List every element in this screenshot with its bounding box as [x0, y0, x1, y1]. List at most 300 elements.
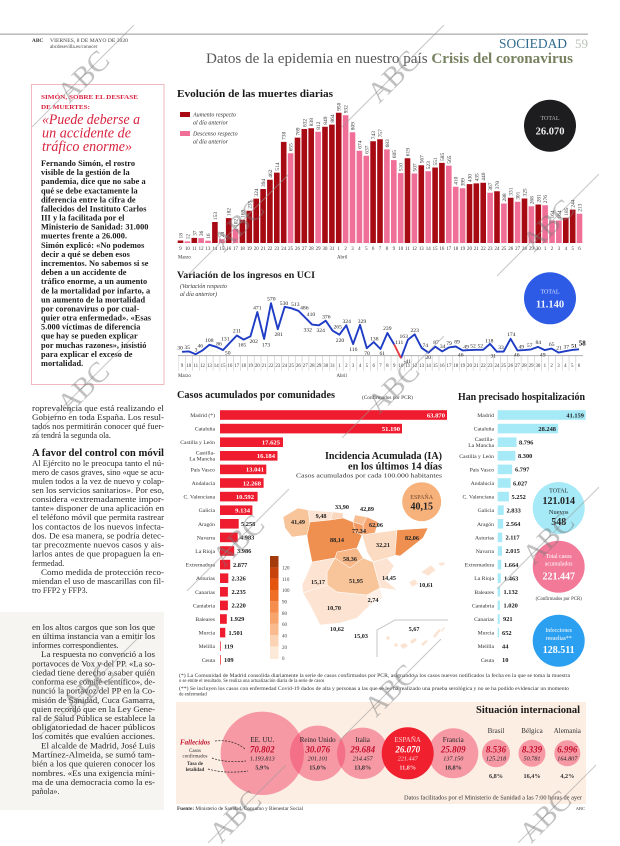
text block: column continuation: Gobierno en toda España. Los resul-: [32, 413, 164, 422]
callout: total ICU: TOTAL: [540, 290, 560, 296]
key: Fallecidos: [180, 738, 210, 746]
region labels: Galicia: [478, 508, 494, 514]
page header: 59: [575, 36, 588, 51]
date axis: 21: [262, 364, 267, 369]
date axis: 11: [193, 364, 199, 369]
values: 921: [503, 616, 513, 623]
bar value labels: 102: [234, 219, 240, 227]
region labels: Aragón: [198, 522, 215, 528]
date axis: 10: [398, 247, 404, 252]
date axis: 9: [393, 247, 396, 252]
small country names: Brasil: [488, 727, 504, 735]
article text: nombres. «Es una exigencia míni-: [32, 769, 155, 778]
date axis: 8: [386, 247, 389, 252]
date axis: 18: [453, 364, 459, 369]
date axis: 13: [419, 364, 425, 369]
fatality rates: 16,4%: [523, 773, 541, 780]
month labels: Marzo: [178, 256, 191, 260]
date axis: 28: [522, 364, 527, 369]
footnotes: de enfermedad: [179, 692, 207, 698]
bar value labels: 832: [302, 119, 308, 127]
date axis: 25: [501, 364, 507, 369]
region labels: La Rioja: [474, 576, 494, 582]
legend: Descenso respecto: [192, 132, 238, 138]
point labels: 49: [519, 344, 524, 350]
deaths: 6.996: [557, 744, 578, 754]
date axis: 5: [571, 247, 574, 252]
point labels: 163: [400, 334, 408, 340]
date axis: 24: [281, 247, 287, 252]
date axis: 26: [295, 247, 300, 252]
region labels: Castilla y León: [459, 454, 494, 460]
region labels: Cataluña: [195, 427, 215, 433]
map values: 9,48: [316, 513, 326, 520]
date axis: 28: [522, 247, 528, 252]
callout: total ICU: [524, 272, 576, 324]
date axis: 1: [544, 364, 547, 369]
bar value labels: 809: [350, 122, 356, 130]
date axis: 20: [467, 247, 472, 252]
point labels: 376: [322, 314, 331, 320]
date axis: 26: [296, 364, 301, 369]
date axis: 19: [460, 364, 466, 369]
sidebar body text: diferencia entre la cifra de: [41, 195, 136, 204]
callout: resolved infections: 128.511: [543, 645, 575, 656]
date axis: 17: [233, 247, 238, 252]
point labels: 324: [317, 328, 325, 334]
region labels: C. Valenciana: [184, 495, 215, 501]
point labels: 46: [458, 353, 464, 359]
month labels: Abril: [337, 256, 348, 260]
footnotes: (**) Se incluyen los casos con enfermedad Covid-19 dados de alta y personas a las que se les ha realizado una prueba serológica y no se ha podido evidenciar un momento: [179, 687, 570, 692]
date axis: 30: [323, 364, 329, 369]
legend: al día anterior: [193, 140, 229, 146]
point labels: 324: [343, 319, 351, 325]
bar value labels: 37: [192, 230, 198, 236]
bar value labels: 268: [529, 196, 535, 204]
fatality rates: 5,9%: [255, 764, 269, 772]
chart subtitle: al día anterior): [180, 291, 217, 298]
region labels: Castilla-: [475, 437, 494, 443]
date axis: 30: [535, 364, 541, 369]
color scale legend: 60: [282, 623, 288, 628]
color scale legend: 40: [282, 634, 288, 640]
date axis: 16: [439, 247, 445, 252]
sidebar body text: Ministerio de Sanidad: 31.000: [41, 223, 148, 232]
point labels: 281: [275, 332, 283, 338]
article text: [32, 623, 156, 796]
callout: total cases: [533, 541, 585, 593]
date axis: 12: [412, 364, 418, 369]
region labels: La Rioja: [195, 549, 215, 555]
date axis: 9: [393, 364, 396, 369]
values: 6.797: [515, 467, 530, 474]
country names: EE. UU.: [250, 736, 275, 744]
bar value labels: 567: [419, 155, 425, 163]
text block: Ejército: mero de casos graves, sino «que se acu-: [32, 468, 164, 477]
negative segment: [394, 344, 401, 358]
chart heading: Han precisado hospitalización: [458, 392, 585, 403]
bar value labels: 812: [316, 121, 322, 130]
chart subtitle: (Variación respecto: [180, 284, 227, 290]
date axis: 15: [219, 247, 225, 252]
chart heading: Evolución de las muertes diarias: [177, 89, 333, 100]
point labels: 530: [280, 301, 288, 307]
bar value labels: 849: [323, 116, 329, 125]
date axis: 27: [302, 247, 307, 252]
values outside bars: 1.929: [230, 616, 244, 623]
date axis: 21: [474, 247, 479, 252]
map values: 51,95: [349, 578, 363, 585]
date axis: 11: [192, 247, 197, 252]
date axis: 24: [495, 247, 500, 252]
region labels: Ceuta: [481, 658, 494, 664]
article text: El alcalde de Madrid, José Luis: [41, 742, 155, 750]
point labels: 52: [470, 344, 476, 350]
fatality rates: 4,2%: [560, 773, 574, 780]
text block: Ejército: [32, 459, 164, 595]
confirmed cases: 50.781: [523, 756, 541, 762]
map values: 62,06: [369, 522, 383, 529]
panel heading: Situación internacional: [476, 705, 580, 716]
page title: Datos de la epidemia en nuestro país Crisis del coronavirus: [206, 51, 573, 67]
date axis: 27: [515, 364, 520, 369]
fatality rates: [255, 764, 574, 780]
fatality rates: 13,8%: [354, 764, 371, 772]
region labels: Cantabria: [193, 603, 215, 609]
map values: 14,45: [382, 575, 396, 582]
PCR note: (Confirmados por PCR): [536, 597, 582, 602]
region labels: Asturias: [475, 535, 495, 541]
sidebar body text: muertes frente a 26.000.: [41, 232, 127, 241]
region labels: Extremadura: [465, 563, 494, 569]
point labels: 58: [579, 339, 586, 347]
article text: obligatoriedad de hacer públicos: [32, 723, 155, 732]
point labels: 165: [238, 342, 246, 348]
region labels: Cataluña: [474, 427, 494, 433]
point labels: 21: [556, 346, 562, 352]
date axis: 1: [338, 364, 341, 369]
date axis: 13: [419, 247, 424, 252]
date axis: 3: [557, 364, 560, 369]
date axis: 11: [405, 247, 410, 252]
confirmed cases: 214.457: [353, 756, 374, 762]
map values: 2,74: [368, 597, 378, 604]
date axis: 11: [406, 364, 411, 369]
bar value labels: 12: [185, 234, 191, 239]
date axis: 2: [550, 364, 553, 369]
article text: ciedad tiene derecho a saber quién: [32, 668, 155, 678]
text block: Ejército: tante» disponer de una aplicación en: [32, 504, 164, 513]
sidebar body text: para explicar el exceso de: [41, 350, 133, 359]
article text: los comités que evalúen acciones.: [32, 732, 155, 741]
date axis: 21: [474, 364, 479, 369]
watermarks: ABC: [361, 355, 426, 420]
region labels: Madrid: [477, 413, 494, 419]
point labels: 174: [507, 332, 516, 338]
chart: Casos acumulados por comunidades: [177, 390, 447, 665]
point labels: -41: [404, 359, 411, 365]
date axis: 12: [412, 247, 417, 252]
bar value labels: 838: [309, 118, 315, 126]
point labels: 116: [349, 347, 358, 353]
region labels: C. Valenciana: [463, 495, 494, 501]
bar value labels: 605: [392, 150, 398, 158]
PCR note: (Confirmados por PCR): [362, 394, 413, 401]
footnotes: [179, 674, 571, 698]
region labels: Canarias: [474, 617, 495, 623]
values: [502, 412, 584, 664]
date axis: 29: [529, 247, 534, 252]
key: Casos: [189, 749, 201, 754]
article text: La respuesta no convenció a los: [41, 650, 155, 659]
values inside bars: 10.592: [236, 494, 255, 501]
confirmed cases: 164.807: [557, 756, 578, 762]
date axis: 23: [488, 247, 493, 252]
deaths: 26.070: [394, 744, 421, 754]
region labels: Melilla: [199, 644, 215, 650]
point labels: 3: [195, 347, 198, 353]
sidebar body text: pandemia, dice que no sabe a: [41, 177, 146, 186]
region labels: Cantabria: [472, 603, 494, 609]
watermarks: ABC: [206, 193, 271, 258]
page header: SOCIEDAD: [499, 37, 567, 52]
point labels: 410: [307, 312, 315, 318]
region labels: Extremadura: [186, 563, 215, 569]
point labels: [177, 296, 586, 365]
date axis: 4: [358, 247, 361, 252]
map heading: [325, 451, 442, 472]
date axis: 8: [386, 364, 389, 369]
bar value labels: 331: [509, 187, 515, 196]
date axis: 22: [481, 364, 486, 369]
bar value labels: 435: [474, 173, 480, 181]
article text: ma de una democracia como la es-: [32, 778, 155, 787]
point labels: 202: [250, 339, 258, 345]
date axis: 24: [494, 364, 500, 369]
text block: column continuation: roprevalencia que está realizando el: [32, 404, 165, 413]
point labels: 49: [540, 353, 546, 359]
text block: Ejército: los contactos de los nuevos infecta-: [32, 522, 164, 532]
map values: 42,89: [360, 506, 374, 513]
source: Fuente: Ministerio de Sanidad, Consumo y Bienestar Social: [177, 807, 304, 812]
bar value labels: 430: [468, 174, 474, 182]
date axis: 29: [529, 364, 534, 369]
bar value labels: 510: [399, 163, 405, 171]
Spain circle: [382, 727, 434, 779]
map values: 33,90: [335, 504, 349, 511]
text block: Ejército: tar precozmente nuevos casos y ais-: [32, 541, 164, 550]
deaths: 30.076: [304, 744, 331, 754]
key: letalidad: [186, 768, 205, 773]
date axis: 25: [501, 247, 507, 252]
map values: 88,14: [330, 537, 344, 544]
values: 8.300: [518, 453, 532, 460]
values inside bars: 12.268: [243, 480, 262, 487]
date axis: 22: [269, 364, 274, 369]
map values: 15,17: [311, 579, 325, 586]
region labels: Baleares: [474, 590, 495, 596]
callout: total cases: 221.447: [542, 572, 575, 582]
point labels: 86: [216, 341, 222, 347]
text block: Ejército: considera «extremadamente impor-: [32, 495, 164, 504]
date axis: 13: [206, 247, 211, 252]
text block: column continuation: tados nos permitirán conocer qué fuer-: [32, 422, 164, 431]
map regions: [283, 508, 445, 625]
chart heading: Variación de los ingresos en UCI: [177, 270, 315, 281]
callout: resolved infections: resueltas**: [546, 636, 572, 642]
sidebar body text: [41, 159, 152, 368]
sidebar body text: incrementos. No sabemos si se: [41, 259, 149, 268]
date axis: 28: [310, 364, 315, 369]
article text: misión de Sanidad, Cuca Gamarra,: [32, 696, 155, 705]
point labels: 138: [370, 337, 379, 343]
callout: total deaths: 26.070: [536, 126, 564, 138]
sidebar body text: Simón explicó: «No podemos: [41, 241, 145, 250]
date axis: 5: [366, 364, 369, 369]
date axis: 25: [289, 364, 294, 369]
bar value labels: 565: [447, 155, 453, 164]
bar value labels: 743: [371, 131, 377, 139]
footnotes: o se emite el resultado. Se realiza una actualización diaria de la serie de casos: [179, 679, 325, 684]
map heading: en los últimos 14 días: [348, 462, 442, 472]
date axis: 29: [316, 247, 321, 252]
callout: total ICU: 11.140: [536, 300, 564, 310]
point labels: 52: [478, 344, 483, 350]
date axis: 16: [440, 364, 445, 369]
region labels: Castilla y León: [180, 440, 215, 446]
color scale legend: 120: [282, 566, 290, 572]
date axis: 14: [426, 247, 431, 252]
map subtitle: Casos acumulados por cada 100.000 habitantes: [296, 474, 443, 480]
values: 10: [502, 657, 508, 664]
point labels: 570: [267, 296, 276, 302]
watermarks: ABC: [358, 658, 423, 723]
sidebar body text: deben a un accidente de: [41, 268, 127, 277]
article text: en los altos cargos que son los que: [32, 623, 156, 632]
sidebar quote: [42, 112, 140, 155]
bar value labels: 164: [550, 210, 556, 218]
deaths: 29.684: [349, 744, 376, 754]
point labels: 471: [253, 306, 262, 312]
bar value labels: [178, 102, 584, 239]
date axis: 4: [565, 247, 568, 252]
point labels: 49: [463, 344, 469, 350]
sidebar body text: visible de la gestión de la: [41, 168, 131, 177]
chart heading: Casos acumulados por comunidades: [177, 390, 335, 401]
fatality rates: 18,8%: [445, 764, 462, 772]
map heading: Incidencia Acumulada (IA): [325, 451, 442, 462]
date axis: 9: [179, 247, 182, 252]
region labels: La Mancha: [468, 443, 494, 449]
bar value labels: 462: [268, 169, 274, 178]
point labels: 87: [433, 340, 439, 346]
values outside bars: 5.258: [241, 521, 255, 528]
bar value labels: 394: [261, 179, 267, 187]
date axis: 5: [571, 364, 574, 369]
bar value labels: 244: [571, 199, 577, 208]
line series: [182, 303, 394, 354]
date axis: 2: [551, 247, 554, 252]
text block: Ejército: miendan el uso de mascarillas con fil-: [32, 577, 164, 586]
bar value labels: 757: [378, 129, 384, 137]
panel: gray article box: [0, 612, 164, 810]
map values: 41,49: [291, 519, 305, 526]
bar value labels: 378: [495, 181, 501, 189]
point labels: 329: [358, 319, 366, 325]
legend: Aumento respecto: [192, 112, 236, 118]
values inside bars: 9.134: [235, 508, 251, 514]
date axis: 1: [544, 247, 547, 252]
region labels: Melilla: [478, 644, 494, 650]
map values: 32,21: [376, 542, 390, 549]
footnotes: (*) La Comunidad de Madrid consolida diariamente la serie de casos confirmados por PCR, asignando a los casos nuevos notificados la fecha en la que se toma la muestra: [179, 674, 571, 679]
bar value labels: 738: [282, 132, 288, 140]
bar value labels: 281: [536, 194, 542, 202]
sidebar body text: qué se debe exactamente la: [41, 186, 138, 195]
key: confirmados: [182, 754, 208, 760]
bar value labels: 674: [357, 140, 363, 149]
sidebar body text: de la mortalidad por infarto, a: [41, 286, 151, 295]
point labels: 30: [177, 345, 183, 351]
callout: total hospitalised: TOTAL: [549, 488, 569, 494]
callout: total cases: Total casos: [546, 554, 572, 560]
country names: [250, 736, 465, 744]
page header: [0, 33, 588, 52]
date axis: 19: [247, 247, 252, 252]
values: 41.159: [566, 412, 584, 419]
date axis: 23: [488, 364, 493, 369]
values inside bars: 17.625: [262, 440, 281, 446]
confirmed cases: 201.101: [308, 756, 328, 762]
sidebar body text: decir a qué se deben esos: [41, 250, 131, 259]
sidebar kicker: SIMÓN, SOBRE EL DESFASE: [41, 93, 139, 101]
text block: Ejército: tro FFP2 y FFP3.: [32, 586, 88, 595]
map values: 10,70: [327, 605, 341, 612]
point labels: 108: [205, 338, 214, 344]
deaths: 25.809: [440, 744, 466, 754]
point labels: 89: [454, 340, 460, 346]
map values: 5,67: [409, 626, 419, 633]
fatality rates: 15,0%: [309, 764, 326, 772]
Canary Islands inset: [377, 620, 448, 657]
values: 1.132: [504, 589, 518, 596]
credit: ABC: [576, 806, 585, 811]
fatality rates: 11,8%: [399, 764, 416, 772]
values: 28.248: [538, 426, 556, 433]
bar value labels: 185: [564, 207, 570, 216]
key: [180, 738, 210, 773]
confirmed cases: 1.193.813: [250, 756, 275, 762]
sidebar body text: III y la facilitada por el: [41, 214, 125, 222]
date axis: 15: [433, 247, 438, 252]
bar value labels: 655: [289, 143, 295, 151]
legend: [180, 112, 238, 146]
chart: Han precisado hospitalización: [458, 392, 586, 664]
date axis: 24: [282, 364, 288, 369]
region labels: Navarra: [476, 549, 494, 555]
key arrows: [208, 741, 248, 772]
date axis: 26: [508, 247, 514, 252]
bar value labels: 235: [247, 200, 253, 209]
values: 1.020: [504, 603, 518, 610]
date axis: 30: [323, 247, 328, 252]
month labels: Abril: [336, 374, 347, 379]
sidebar body text: por muchas razones», insistió: [41, 341, 146, 350]
bar value labels: 182: [227, 208, 233, 216]
date axis: 4: [359, 364, 362, 369]
bar value labels: 585: [440, 153, 446, 161]
